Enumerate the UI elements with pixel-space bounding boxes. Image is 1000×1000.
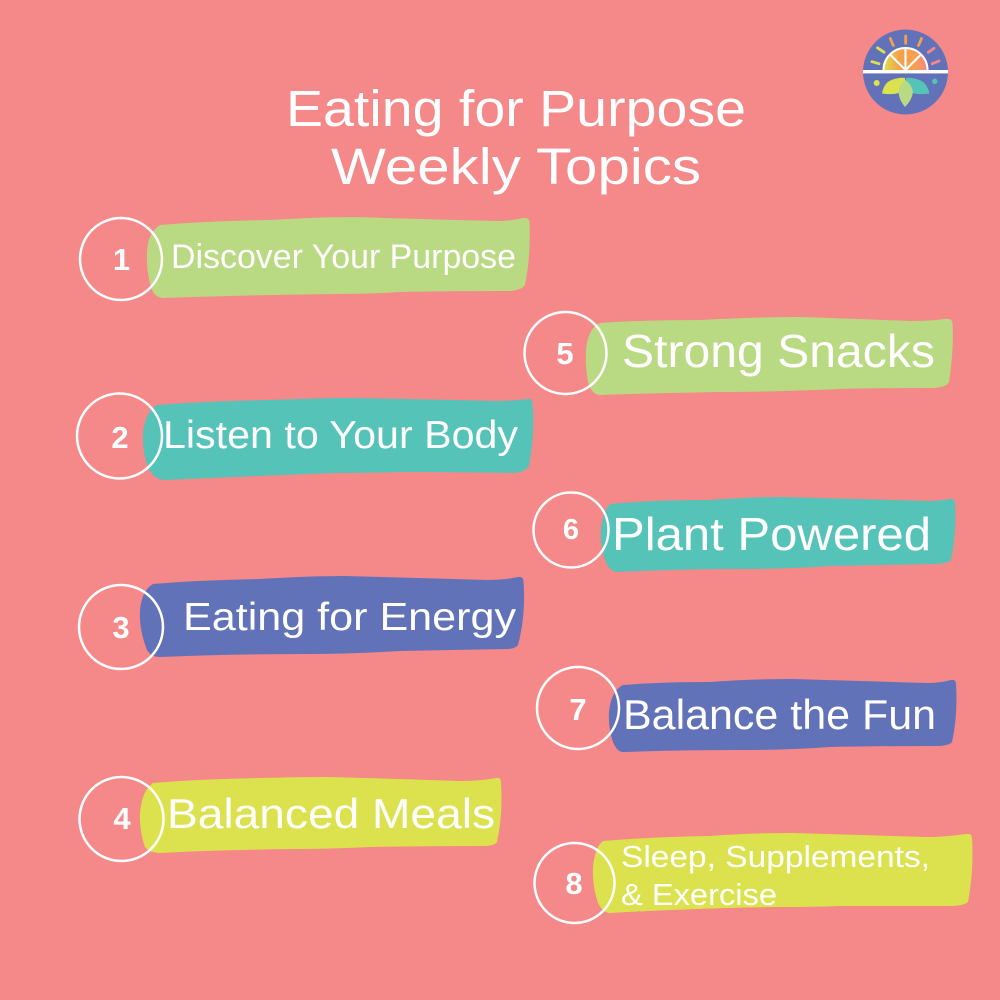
topic 1: Discover Your Purpose xyxy=(80,217,530,300)
title: Eating for Purpose xyxy=(286,80,746,137)
topic 5: Strong Snacks: Strong Snacks xyxy=(622,325,935,377)
topic 6: Plant Powered xyxy=(534,492,956,572)
topic 6: Plant Powered: 6 xyxy=(563,514,579,546)
topic 4: Balanced Meals: Balanced Meals xyxy=(167,790,495,837)
topic 3: Eating for Energy: 3 xyxy=(112,610,130,645)
topic 3: Eating for Energy: Eating for Energy xyxy=(183,596,517,639)
topic 2: Listen to Your Body: 2 xyxy=(111,420,129,455)
topic 1: Discover Your Purpose: Discover Your Purpose xyxy=(171,238,516,276)
topic 8: Sleep, Supplements, & Exercise: 8 xyxy=(565,866,583,901)
title: Weekly Topics xyxy=(331,138,701,195)
topic 4: Balanced Meals xyxy=(80,777,502,861)
topic 7: Balance the Fun: 7 xyxy=(569,692,587,727)
topic 5: Strong Snacks xyxy=(524,312,953,395)
topic 1: Discover Your Purpose: 1 xyxy=(113,242,130,277)
topic 2: Listen to Your Body: Listen to Your Body xyxy=(163,414,519,457)
topic 8: Sleep, Supplements, & Exercise: Sleep, Supplements, xyxy=(621,839,930,874)
icon: citrus logo xyxy=(863,30,948,114)
topic 8: Sleep, Supplements, & Exercise: & Exercise xyxy=(621,877,777,912)
title xyxy=(286,80,746,195)
topic 2: Listen to Your Body xyxy=(77,394,533,480)
topic 8: Sleep, Supplements, & Exercise xyxy=(534,833,972,923)
topic 7: Balance the Fun: Balance the Fun xyxy=(623,691,936,738)
topic 5: Strong Snacks: 5 xyxy=(556,336,574,371)
topic 3: Eating for Energy xyxy=(79,576,524,669)
topic 6: Plant Powered: Plant Powered xyxy=(612,508,931,560)
topic 4: Balanced Meals: 4 xyxy=(113,801,131,836)
topic 7: Balance the Fun xyxy=(537,667,956,752)
